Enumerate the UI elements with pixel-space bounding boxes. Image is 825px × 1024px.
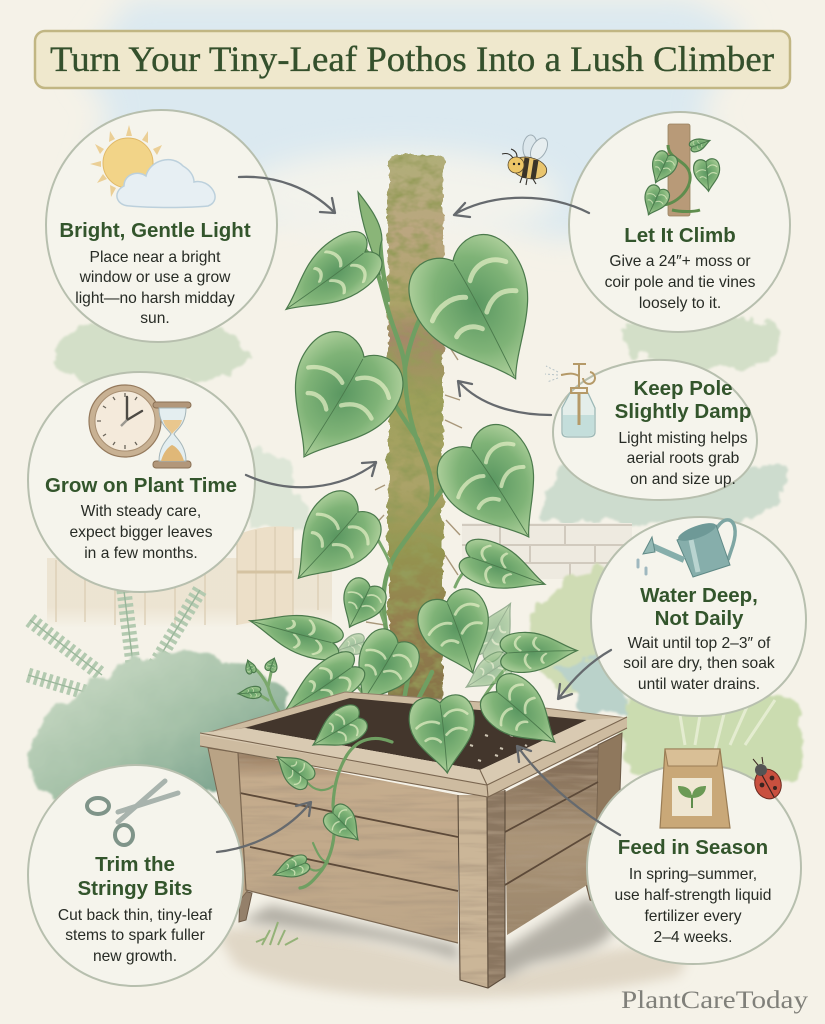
body text — [58, 907, 213, 965]
body text: in a few months. — [84, 545, 198, 562]
heading: Grow on Plant Time — [45, 474, 237, 497]
title text: Turn Your Tiny-Leaf Pothos Into a Lush Climber — [50, 39, 774, 79]
leaf: lower left — [272, 482, 390, 602]
heading: Bright, Gentle Light — [59, 219, 251, 242]
planter back rim — [200, 692, 627, 735]
trailing vine — [300, 738, 392, 888]
body text: on and size up. — [630, 471, 736, 488]
leaf: mid right — [426, 414, 568, 563]
body text: coir pole and tie vines — [605, 274, 756, 291]
planter front post — [458, 795, 488, 988]
trailing leaf 1 — [269, 746, 318, 793]
body text: expect bigger leaves — [69, 524, 213, 541]
leaf: large mid left — [259, 320, 415, 484]
front leaves and trailing vine — [269, 666, 573, 888]
leaf: cluster right — [412, 583, 506, 685]
leaf: lower right narrow — [455, 534, 553, 605]
heading: Slightly Damp — [615, 400, 751, 423]
body text — [623, 635, 775, 693]
body text: loosely to it. — [639, 295, 721, 312]
body text: Light misting helps — [618, 430, 748, 447]
leaf: cluster center — [337, 622, 426, 717]
leaf: front left — [304, 700, 371, 760]
background: fern fronds — [28, 583, 200, 692]
body text: use half-strength liquid — [615, 887, 771, 904]
planter left legs — [239, 890, 252, 922]
leaf: pale back center right — [459, 648, 516, 699]
leaf: front right — [473, 666, 573, 763]
panel: water deep not daily — [591, 517, 806, 716]
background: right garden bushes — [530, 567, 804, 780]
planter right face — [505, 745, 598, 935]
icon: watering can — [638, 520, 735, 577]
leaf: small center — [331, 574, 391, 637]
arrow: time to pole — [246, 462, 376, 487]
background: left garden bushes — [30, 652, 300, 812]
body text: new growth. — [93, 948, 177, 965]
arrow: light to pole — [239, 177, 335, 213]
leaf: top left — [269, 223, 389, 333]
heading — [77, 853, 193, 900]
sprouts: small left shoots — [238, 656, 300, 733]
heading: Not Daily — [655, 607, 744, 630]
body text: In spring–summer, — [629, 866, 757, 883]
icon: pole with vine — [638, 124, 722, 220]
body text: light—no harsh midday — [75, 290, 235, 307]
arrow: water to soil — [558, 650, 611, 699]
body text: window or use a grow — [79, 269, 231, 286]
icon: scissors — [87, 781, 178, 845]
icon: clock — [89, 385, 161, 457]
logo: PlantCareToday: PlantCareToday — [621, 987, 809, 1014]
body text: fertilizer every — [644, 908, 742, 925]
moss pole — [366, 155, 462, 705]
arrow: trim to vine — [217, 802, 311, 852]
body text — [605, 253, 756, 312]
heading: Trim the — [95, 853, 175, 876]
leaf: cluster far right — [500, 631, 578, 673]
icon: ladybug — [751, 757, 785, 803]
bee — [502, 134, 551, 185]
leaf: pale back left — [334, 632, 369, 660]
title banner — [35, 31, 790, 88]
leaf: spike at top — [358, 192, 382, 275]
arrow: climb to pole — [454, 198, 589, 217]
body text — [618, 430, 748, 488]
plant vines — [328, 240, 507, 740]
leaf: cluster left — [271, 645, 370, 731]
body text: Give a 24″+ moss or — [609, 253, 751, 270]
planter front rim — [200, 717, 627, 797]
body text: With steady care, — [81, 503, 201, 520]
body text: stems to spark fuller — [65, 927, 205, 944]
arrow: feed to soil — [517, 746, 620, 835]
trailing leaf 2 — [320, 800, 369, 850]
body text: 2–4 weeks. — [654, 929, 732, 946]
heading: Let It Climb — [624, 224, 736, 247]
wooden planter — [200, 692, 627, 988]
panel: bright gentle light — [46, 110, 277, 342]
heading: Feed in Season — [618, 836, 768, 859]
planter right post — [595, 733, 622, 905]
planter soil — [245, 698, 587, 770]
planter left face — [238, 753, 458, 943]
leaf: cluster far left — [245, 601, 346, 664]
icon: spray bottle — [545, 364, 595, 437]
leaf: pale back right — [466, 595, 525, 666]
background: brick wall — [462, 523, 632, 580]
heading: Keep Pole — [633, 377, 733, 400]
panel: feed in season — [587, 749, 801, 964]
body text — [75, 249, 235, 327]
body text — [615, 866, 771, 946]
icon: fertilizer bag — [660, 749, 730, 828]
leaf: center front — [407, 693, 480, 776]
panel: keep pole slightly damp — [545, 360, 757, 500]
plant leaves — [238, 192, 578, 733]
heading — [615, 377, 751, 423]
icon: sun and cloud — [90, 125, 215, 208]
heading — [640, 584, 758, 630]
leaf: large top right — [396, 223, 567, 406]
body text: Wait until top 2–3″ of — [628, 635, 771, 652]
background: distant foliage — [55, 312, 787, 527]
panel: grow on plant time — [28, 372, 255, 592]
body text: aerial roots grab — [627, 450, 740, 467]
background: wooden fence — [47, 526, 332, 628]
trailing leaf 3 — [270, 853, 312, 884]
body text — [69, 503, 213, 562]
heading: Stringy Bits — [77, 877, 193, 900]
body text: until water drains. — [638, 676, 760, 693]
panel: let it climb — [569, 112, 790, 332]
body text: Cut back thin, tiny-leaf — [58, 907, 213, 924]
body text: sun. — [140, 310, 170, 327]
body text: soil are dry, then soak — [623, 655, 775, 672]
heading: Water Deep, — [640, 584, 758, 607]
ground and shadow — [215, 895, 690, 998]
body text: Place near a bright — [90, 249, 221, 266]
arrow: damp to pole — [458, 381, 551, 415]
icon: hourglass — [153, 402, 191, 468]
panel: trim the stringy bits — [28, 765, 243, 986]
